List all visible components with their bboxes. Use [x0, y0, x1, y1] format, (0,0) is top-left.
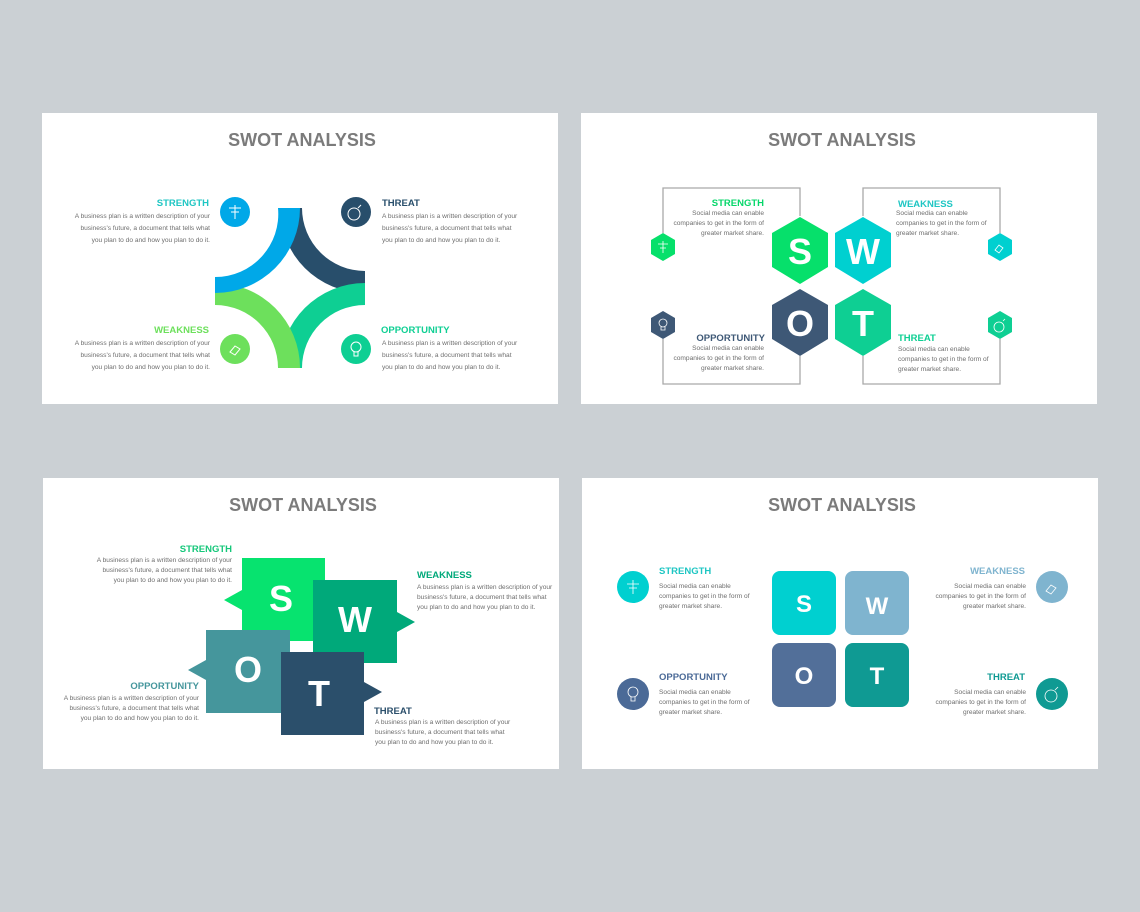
- title 1: SWOT ANALYSIS: [228, 130, 376, 150]
- text: s4: companies to get in the form of: [659, 593, 750, 600]
- text: threat: business's future, a document that tells what: [382, 225, 512, 232]
- text: s4: companies to get in the form of: [659, 699, 750, 706]
- panel: slide 2 hexagons: [581, 113, 1097, 404]
- text: opportunity: [381, 325, 518, 371]
- text: s4: Social media can enable: [954, 583, 1026, 590]
- text: s4: Social media can enable: [659, 583, 731, 590]
- text: s2: STRENGTH: [712, 198, 764, 209]
- text: s2: Social media can enable: [692, 345, 764, 352]
- hexagons: [772, 217, 891, 356]
- panel: slide 3 speech boxes: [43, 478, 559, 769]
- text: s3: business's future, a document that tells what: [102, 567, 232, 574]
- text: s3: business's future, a document that tells what: [375, 729, 505, 736]
- text: s3: OPPORTUNITY: [130, 681, 200, 692]
- title 2: SWOT ANALYSIS: [768, 130, 916, 150]
- icons slide 1: [220, 197, 371, 364]
- text: weakness: business's future, a document that tells what: [80, 352, 210, 359]
- text: s3: A business plan is a written description of your: [97, 557, 233, 564]
- text: s3: you plan to do and how you plan to do it.: [375, 739, 494, 746]
- text: weakness: WEAKNESS: [154, 325, 209, 336]
- boxes: W: [338, 599, 372, 640]
- text: threat: [382, 198, 518, 244]
- text: s3: THREAT: [374, 706, 412, 717]
- squares: [772, 571, 909, 707]
- text: strength: STRENGTH: [157, 198, 209, 209]
- text: s2: OPPORTUNITY: [696, 333, 766, 344]
- text: opportunity: you plan to do and how you plan to do it.: [382, 364, 501, 371]
- text: s4: companies to get in the form of: [935, 699, 1026, 706]
- panel: slide 1 arcs: [42, 113, 558, 404]
- text: weakness: [75, 325, 211, 371]
- text: strength: [75, 198, 211, 244]
- hexagons: W: [846, 231, 880, 272]
- text: opportunity: A business plan is a written description of your: [382, 340, 518, 347]
- text: s3: you plan to do and how you plan to do it.: [417, 604, 536, 611]
- text: s2: THREAT: [898, 333, 936, 344]
- text: opportunity: OPPORTUNITY: [381, 325, 450, 336]
- panel: slide 4 rounded squares: [582, 478, 1098, 769]
- text: s3: STRENGTH: [180, 544, 232, 555]
- text: threat: A business plan is a written description of your: [382, 213, 518, 220]
- text: s4: greater market share.: [659, 603, 722, 610]
- text: s2: companies to get in the form of: [898, 356, 989, 363]
- text: s4: WEAKNESS: [970, 566, 1025, 577]
- text: s3: business's future, a document that tells what: [69, 705, 199, 712]
- text: s2: [673, 198, 989, 373]
- text: s4: Social media can enable: [954, 689, 1026, 696]
- text: s3: A business plan is a written description of your: [64, 695, 200, 702]
- text: s3: A business plan is a written description of your: [417, 584, 553, 591]
- text: strength: you plan to do and how you plan to do it.: [92, 237, 210, 244]
- boxes: O: [234, 649, 262, 690]
- text: s2: greater market share.: [896, 230, 959, 237]
- text: s2: greater market share.: [898, 366, 961, 373]
- text: s3: A business plan is a written description of your: [375, 719, 511, 726]
- text: s4: greater market share.: [659, 709, 722, 716]
- text: s4: STRENGTH: [659, 566, 711, 577]
- text: threat: you plan to do and how you plan to do it.: [382, 237, 501, 244]
- text: s3: WEAKNESS: [417, 570, 472, 581]
- text: s3: business's future, a document that tells what: [417, 594, 547, 601]
- boxes: T: [308, 673, 330, 714]
- squares: O: [795, 663, 813, 690]
- hexagons: O: [786, 303, 814, 344]
- text: s2: WEAKNESS: [898, 199, 953, 210]
- arc shape: [215, 208, 365, 368]
- boxes: S: [269, 578, 293, 619]
- text: s2: Social media can enable: [898, 346, 970, 353]
- text: strength: business's future, a document that tells what: [80, 225, 210, 232]
- text: s3: [64, 544, 553, 746]
- text: s2: companies to get in the form of: [896, 220, 987, 227]
- text: s2: greater market share.: [701, 365, 764, 372]
- squares: W: [866, 593, 889, 620]
- title 3: SWOT ANALYSIS: [229, 495, 377, 515]
- text: s4: greater market share.: [963, 709, 1026, 716]
- hexagons: S: [788, 231, 812, 272]
- text: s2: greater market share.: [701, 230, 764, 237]
- text: s4: greater market share.: [963, 603, 1026, 610]
- text: s4: OPPORTUNITY: [659, 672, 728, 683]
- text: s2: Social media can enable: [692, 210, 764, 217]
- small hex icons: [651, 233, 1012, 339]
- icons slide 4: [617, 571, 1068, 710]
- text: s4: THREAT: [987, 672, 1025, 683]
- text: s4: companies to get in the form of: [935, 593, 1026, 600]
- text: weakness: you plan to do and how you plan to do it.: [92, 364, 210, 371]
- text: s2: Social media can enable: [896, 210, 968, 217]
- text: s4: Social media can enable: [659, 689, 731, 696]
- title 4: SWOT ANALYSIS: [768, 495, 916, 515]
- text: s2: companies to get in the form of: [673, 355, 764, 362]
- text: strength: A business plan is a written description of your: [75, 213, 211, 220]
- text: threat: THREAT: [382, 198, 420, 209]
- text: s3: you plan to do and how you plan to do it.: [81, 715, 199, 722]
- text: s4: [659, 566, 1026, 716]
- text: weakness: A business plan is a written description of your: [75, 340, 211, 347]
- text: opportunity: business's future, a document that tells what: [382, 352, 512, 359]
- hexagons: T: [852, 303, 874, 344]
- boxes: [188, 558, 415, 735]
- text: s2: companies to get in the form of: [673, 220, 764, 227]
- squares: S: [796, 591, 812, 618]
- frame lines: [663, 188, 1000, 384]
- squares: T: [870, 663, 885, 690]
- text: s3: you plan to do and how you plan to do it.: [114, 577, 232, 584]
